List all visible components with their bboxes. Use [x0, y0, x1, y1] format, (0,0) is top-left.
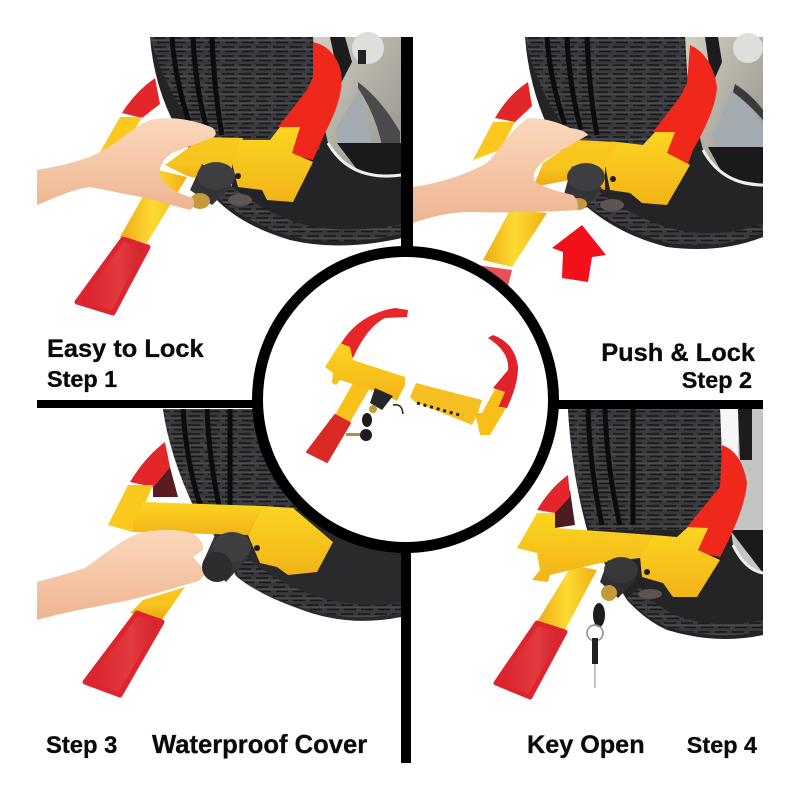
rim highlight	[703, 150, 763, 185]
clamp right body	[232, 127, 313, 202]
key set	[587, 603, 605, 688]
hand	[37, 118, 216, 210]
knob	[190, 162, 252, 209]
right bar yellow	[410, 383, 482, 425]
left jaw dark inner	[555, 490, 575, 528]
label: step 2: Step 2	[682, 367, 752, 393]
left jaw red	[495, 82, 532, 122]
handle red grip	[475, 265, 512, 290]
clamp right body	[640, 527, 720, 597]
body hole	[610, 176, 616, 182]
handle yellow	[130, 587, 185, 620]
clamp sleeve	[533, 140, 618, 190]
rim highlight	[733, 545, 763, 573]
divider: top vertical	[401, 37, 413, 257]
right hook red	[488, 335, 518, 408]
handle yellow	[335, 383, 370, 422]
right jaw yellow	[475, 389, 506, 435]
label: step 3: Step 3	[46, 732, 117, 759]
left jaw red	[537, 475, 570, 513]
wheel rim step 1	[313, 32, 402, 182]
left jaw dark inner	[153, 467, 178, 497]
lock barrel	[600, 557, 662, 601]
right jaw red	[687, 445, 747, 557]
hand	[37, 530, 205, 620]
panel: step 2 push and lock	[413, 33, 763, 393]
handle red grip	[496, 623, 565, 697]
wheel rim step 4	[718, 409, 763, 574]
body hole	[235, 173, 241, 179]
body hole	[254, 545, 260, 551]
lock and keys	[346, 388, 403, 441]
right jaw red	[278, 42, 342, 160]
center circle	[258, 252, 554, 548]
handle red grip	[85, 613, 162, 695]
label: step 1: Step 1	[47, 366, 117, 392]
clamp bar	[133, 502, 263, 535]
divider: bottom vertical	[401, 545, 411, 763]
left jaw yellow	[100, 117, 142, 152]
wheel rim step 2	[685, 33, 763, 187]
panel: product in center	[307, 308, 518, 462]
handle yellow	[483, 210, 547, 267]
clamp bar	[517, 513, 653, 582]
handle red grip	[307, 415, 350, 462]
hand	[413, 118, 588, 223]
left jaw red	[122, 78, 160, 118]
right jaw red	[653, 45, 717, 167]
body hole	[644, 569, 650, 575]
knob	[564, 163, 624, 211]
left hook red	[340, 308, 408, 358]
panel: step 3 waterproof cover	[37, 409, 401, 759]
handle red grip	[77, 239, 148, 313]
handle yellow	[537, 565, 597, 630]
clamp sleeve	[165, 137, 243, 187]
tire step 3	[163, 409, 401, 621]
tire step 2	[525, 37, 763, 249]
heading: waterproof cover: Waterproof Cover	[152, 731, 367, 759]
clamp right body	[605, 132, 690, 205]
tire step 1	[150, 37, 402, 246]
left jaw yellow	[473, 122, 515, 160]
heading: easy to lock: Easy to Lock	[47, 335, 205, 363]
panel: step 1 easy to lock	[37, 32, 402, 392]
arrow: push up	[552, 225, 606, 282]
handle yellow	[120, 170, 187, 243]
divider: left horizontal	[37, 400, 259, 408]
left jaw red	[130, 442, 170, 487]
divider: right horizontal	[552, 400, 763, 409]
left jaw yellow	[108, 485, 153, 532]
heading: push and lock: Push & Lock	[601, 339, 756, 367]
left body yellow	[325, 343, 405, 401]
waterproof cover knob	[202, 532, 251, 582]
bar holes	[417, 403, 463, 416]
panel: step 4 key open	[496, 409, 763, 759]
heading: key open: Key Open	[527, 731, 645, 759]
tire step 4	[568, 409, 763, 639]
rim highlight	[328, 143, 402, 176]
label: step 4: Step 4	[687, 732, 757, 758]
clamp right body	[248, 506, 333, 575]
